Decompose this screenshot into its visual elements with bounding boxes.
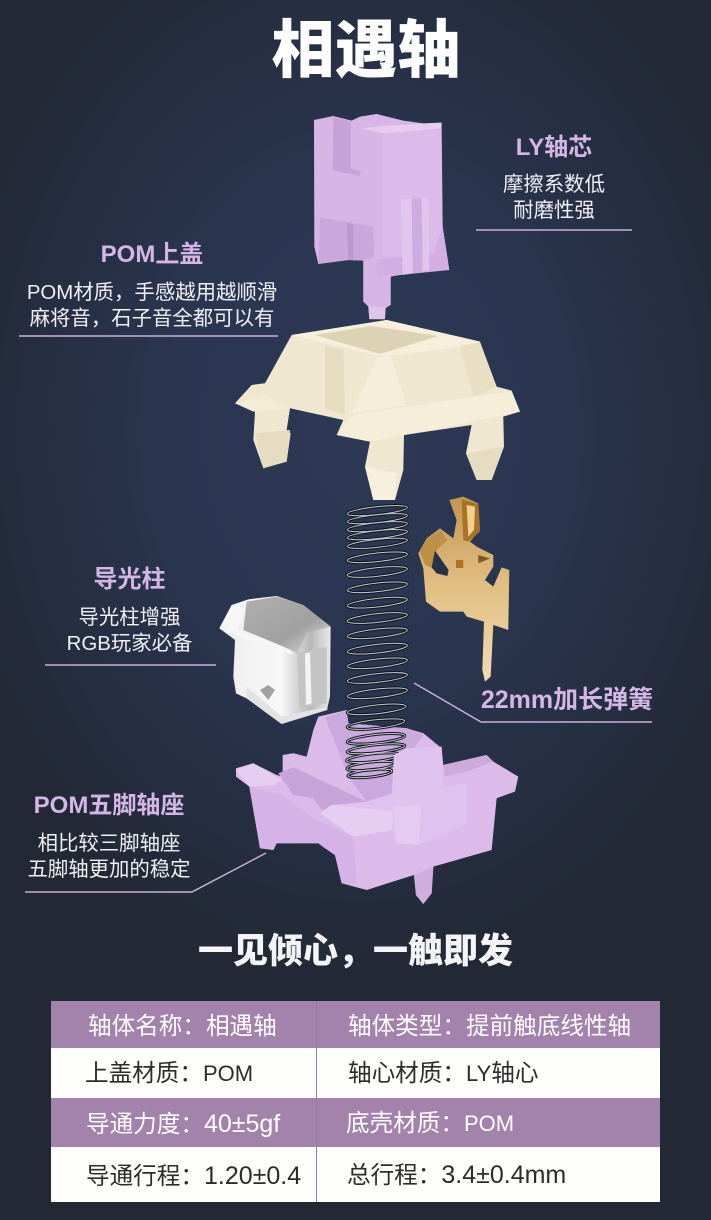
- gold contact leaf: [418, 497, 509, 682]
- title: 相遇轴: [272, 16, 460, 86]
- top cover underline: [19, 335, 278, 337]
- housing top cover: [235, 320, 520, 500]
- spring: [347, 504, 407, 780]
- row 1: [51, 1001, 660, 1048]
- stem: LY core: [314, 114, 449, 319]
- light pipe: [219, 596, 331, 724]
- switch base front corner: [320, 747, 467, 845]
- callout: POM top cover: POM材质，手感越用越顺滑: [27, 282, 277, 304]
- callout: POM base: POM五脚轴座: [34, 792, 184, 819]
- row 4: 总行程：3.4±0.4mm: [347, 1161, 566, 1189]
- callout: POM base: 五脚轴更加的稳定: [27, 859, 191, 881]
- callout: light pipe: RGB玩家必备: [67, 633, 192, 655]
- callout: LY stem: 耐磨性强: [513, 200, 595, 222]
- light pipe underline: [45, 664, 216, 666]
- callout: POM top cover: [27, 241, 277, 330]
- row 1: 轴体类型：提前触底线性轴: [348, 1014, 631, 1040]
- callout: light pipe: [67, 566, 192, 655]
- spec table: [51, 1001, 660, 1202]
- row 3: 导通力度：40±5gf: [86, 1110, 280, 1138]
- stem underline: [476, 229, 632, 231]
- callout: light pipe: 导光柱: [94, 566, 166, 593]
- row 1: 轴体名称：相遇轴: [88, 1014, 277, 1040]
- callout: 22mm spring: 22mm加长弹簧: [481, 686, 653, 714]
- callout: LY stem: [503, 134, 605, 222]
- row 4: [86, 1161, 566, 1190]
- row 2: [85, 1060, 538, 1087]
- switch base: [236, 710, 518, 904]
- callout: LY stem: 摩擦系数低: [503, 174, 605, 196]
- row 4: 导通行程：1.20±0.4: [86, 1162, 301, 1190]
- callout: light pipe: 导光柱增强: [79, 607, 180, 629]
- callout: POM top cover: POM上盖: [101, 241, 203, 268]
- callout: POM base: 相比较三脚轴座: [38, 833, 180, 855]
- base pointer line: [25, 853, 266, 892]
- row 2: 上盖材质：POM: [85, 1061, 253, 1087]
- row 3: [51, 1098, 660, 1147]
- row 2: 轴心材质：LY轴心: [348, 1061, 538, 1087]
- callout: POM base: [27, 792, 191, 881]
- callout: LY stem: LY轴芯: [516, 134, 592, 161]
- callout: POM top cover: 麻将音，石子音全都可以有: [30, 308, 274, 330]
- spring pointer line: [414, 683, 652, 722]
- slogan: 一见倾心，一触即发: [198, 932, 513, 971]
- row 3: 底壳材质：POM: [346, 1111, 514, 1137]
